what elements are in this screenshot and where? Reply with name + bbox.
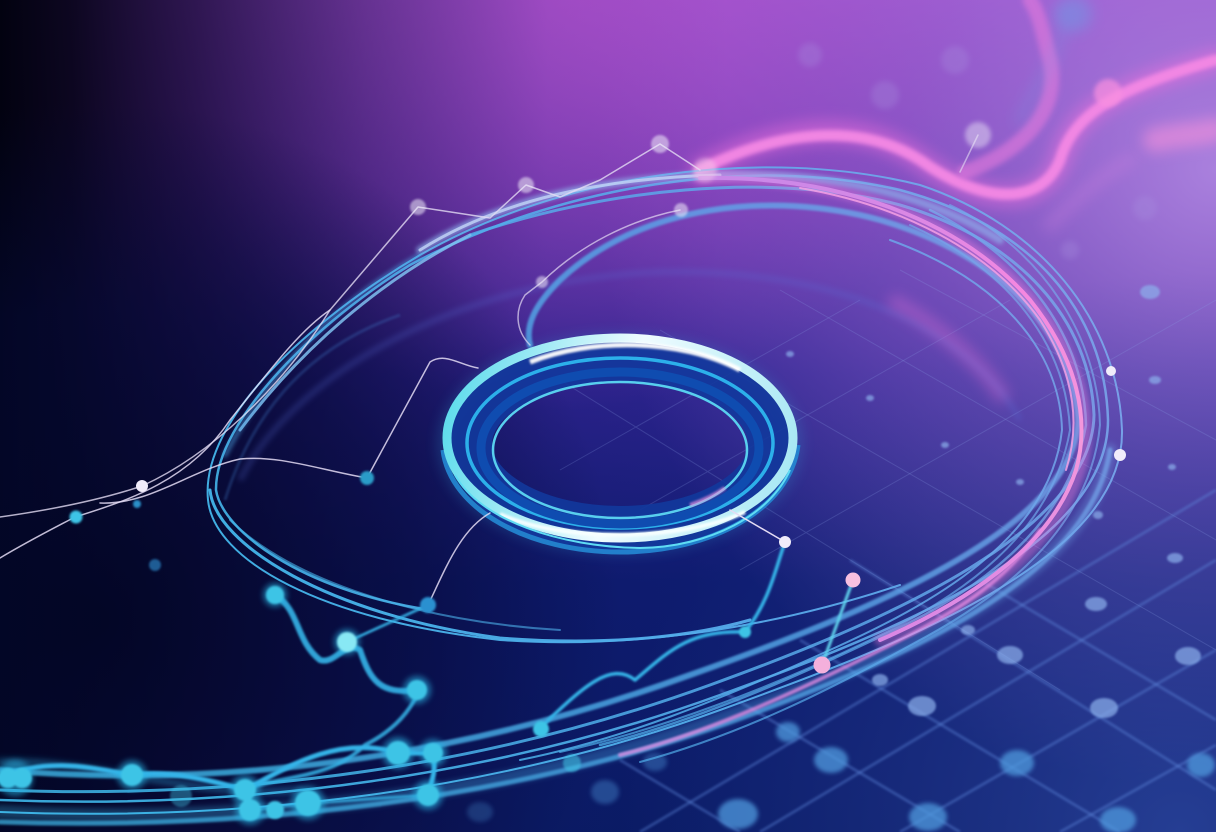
data nodes: cyan xyxy=(0,471,751,821)
ring outer edge xyxy=(447,338,793,538)
perspective grid xyxy=(467,43,1216,832)
thin white data lines xyxy=(0,135,978,605)
central ring xyxy=(443,338,798,552)
big orbit rings: pink strands xyxy=(620,178,1086,755)
ring glow xyxy=(444,340,796,548)
ring shadow band xyxy=(443,445,798,552)
data nodes: pale xyxy=(136,79,1126,674)
pink background ribbons xyxy=(700,0,1216,225)
big orbit rings: blue strands xyxy=(0,167,1122,823)
data nodes: cyan glow xyxy=(0,583,447,825)
ring body xyxy=(470,360,770,528)
big orbit rings: blurred reflection xyxy=(225,272,1020,500)
cyan data lines xyxy=(0,542,853,810)
ring inner edge xyxy=(493,382,747,518)
